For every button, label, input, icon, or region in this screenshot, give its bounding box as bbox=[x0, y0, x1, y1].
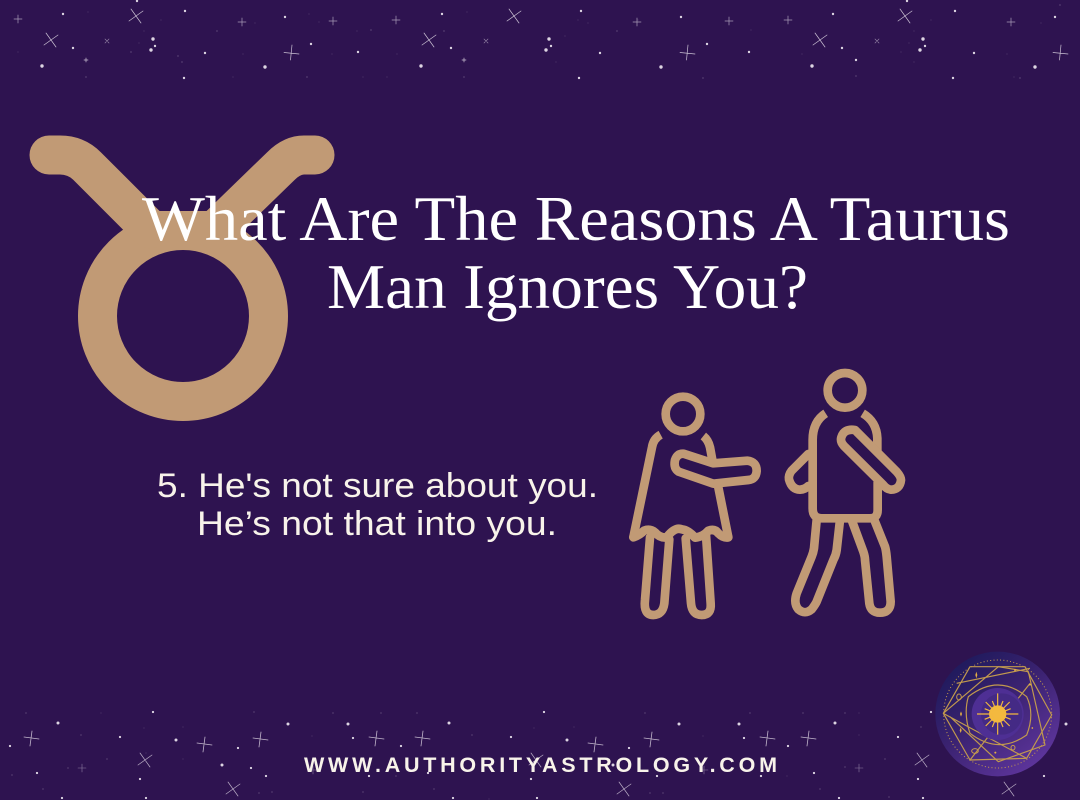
man head bbox=[828, 373, 862, 408]
starfield: bottom band bbox=[10, 712, 1066, 799]
logo sun bbox=[977, 693, 1018, 735]
reason text bbox=[157, 467, 598, 543]
taurus ring bbox=[98, 230, 268, 402]
reason text: He’s not that into you. bbox=[197, 505, 557, 543]
woman arm bbox=[675, 454, 757, 484]
taurus horns bbox=[49, 155, 315, 230]
horn junction fill bbox=[140, 211, 225, 245]
title: Man Ignores You? bbox=[327, 252, 808, 322]
logo dotted ring bbox=[944, 660, 1052, 768]
dress hem bbox=[633, 529, 728, 538]
title: What Are The Reasons A Taurus bbox=[142, 184, 1010, 254]
man legs bbox=[795, 520, 891, 613]
woman legs bbox=[645, 535, 711, 615]
icon: woman reaching toward man bbox=[633, 397, 757, 615]
man torso bbox=[813, 413, 878, 518]
icon: taurus zodiac symbol bbox=[49, 155, 315, 402]
reason text: 5. He's not sure about you. bbox=[157, 467, 598, 505]
title bbox=[142, 184, 1010, 322]
icon: man walking away bbox=[789, 373, 901, 613]
man left arm bbox=[789, 454, 808, 490]
logo geometric lines bbox=[943, 667, 1052, 762]
man right arm bbox=[841, 430, 901, 490]
woman head bbox=[666, 397, 700, 431]
logo disc bbox=[935, 652, 1060, 776]
woman dress bbox=[633, 435, 728, 537]
logo: astrology emblem bbox=[935, 652, 1060, 776]
starfield: top band bbox=[14, 1, 1068, 78]
website footer: WWW.AUTHORITYASTROLOGY.COM bbox=[304, 753, 777, 777]
logo small ornaments bbox=[960, 669, 1033, 754]
logo inner circle bbox=[972, 688, 1024, 740]
